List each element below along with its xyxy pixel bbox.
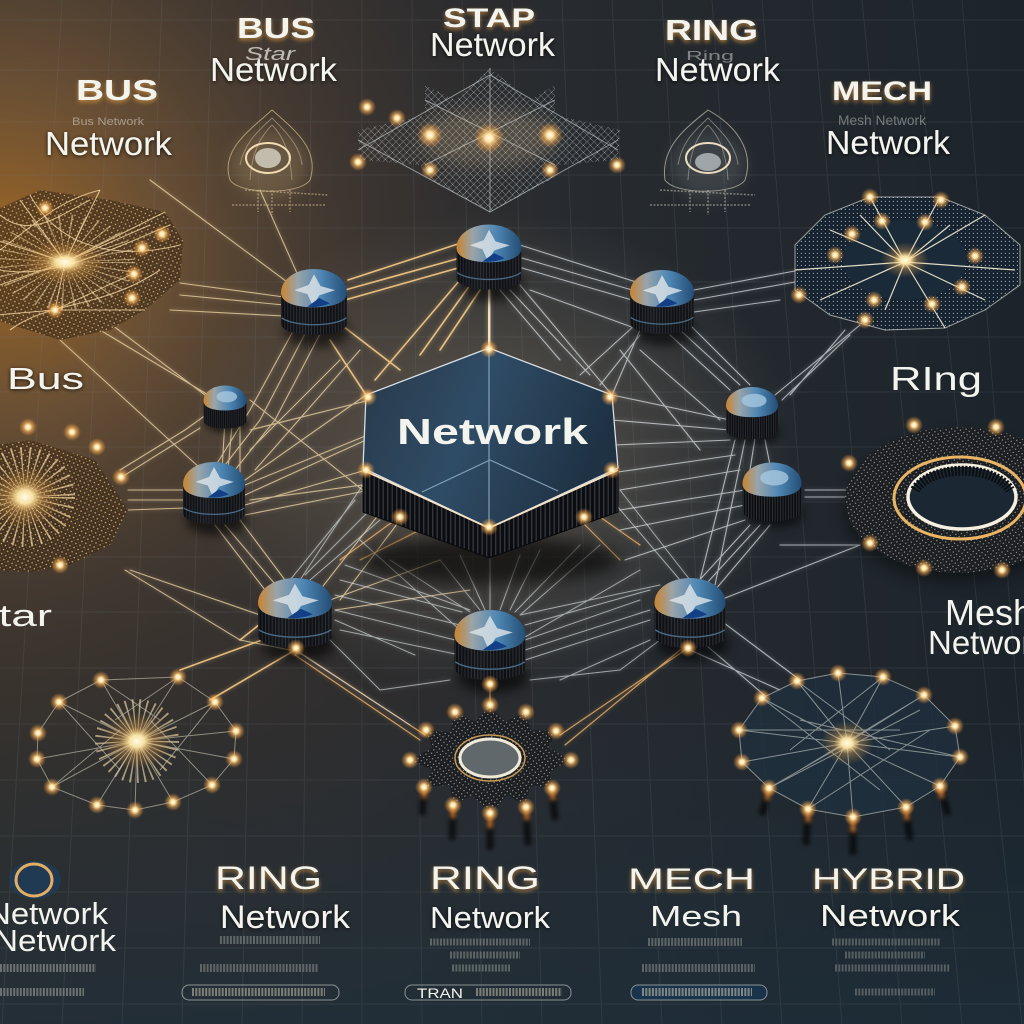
node bottom right	[654, 578, 728, 661]
bottom label: hybrid network	[812, 863, 965, 992]
cluster: star network bottom left	[28, 668, 245, 819]
bottom label: ring network 2: RING	[430, 860, 540, 896]
bottom label: hybrid network: HYBRID	[812, 863, 965, 896]
label: star network: STAP	[443, 3, 535, 33]
label: bus star network	[210, 13, 338, 88]
bottom label: ring network 1	[182, 860, 351, 1000]
cluster: ring mesh right top	[790, 188, 1020, 330]
label: bus network left: Network	[45, 125, 173, 162]
label: bus network left	[45, 75, 173, 162]
label: bus star network: Star	[245, 44, 297, 64]
side labels	[0, 360, 1024, 661]
bottom label: ring network 1: RING	[215, 860, 322, 896]
label: ring: RIng	[890, 360, 982, 397]
node bottom left	[258, 578, 335, 661]
label: mesh network	[826, 76, 951, 161]
cluster: small icon top right	[650, 110, 755, 215]
node left	[183, 462, 247, 535]
label: ring network: Network	[655, 51, 781, 88]
label: ring network	[655, 15, 781, 88]
hexagon label: Network	[397, 411, 589, 452]
node right	[742, 462, 804, 527]
bottom label: ring network 2: Network	[430, 900, 551, 935]
nodes ring	[183, 224, 804, 693]
bottom label: ring network 1: Network	[220, 899, 351, 935]
bottom label: mesh: Mesh	[650, 901, 742, 933]
cluster: ring mesh right bottom	[840, 416, 1024, 582]
label: star network: Network	[430, 26, 556, 63]
link glow	[60, 180, 860, 745]
bottom label: mesh: MECH	[628, 863, 755, 896]
label: bus network left: BUS	[76, 75, 158, 107]
bottom label: hybrid network: Network	[820, 898, 961, 933]
cluster: ring gear bottom centre	[401, 696, 580, 850]
cluster: hybrid mesh bottom right	[730, 664, 969, 855]
node top right	[630, 270, 697, 346]
node small right	[726, 387, 780, 444]
node small left	[204, 386, 248, 433]
label: bus: Bus	[7, 361, 84, 396]
top labels	[45, 3, 951, 162]
bottom label: far left network	[0, 861, 117, 992]
node bottom	[454, 610, 528, 693]
node top	[456, 224, 524, 301]
label: ring network: Ring	[686, 48, 734, 63]
label: mesh network	[928, 592, 1024, 661]
warm links: left side	[60, 180, 470, 650]
label: bus star network: Network	[210, 51, 338, 88]
bottom label: ring network 2	[405, 860, 571, 1001]
node top left	[281, 269, 350, 347]
bottom label: mesh	[628, 863, 767, 1000]
cluster: bus mesh left	[0, 190, 183, 340]
bottom labels	[0, 860, 965, 1001]
label: mesh network: MECH	[832, 76, 932, 106]
cluster: star mesh left	[0, 418, 130, 574]
label: bus network left: Bus Network	[72, 116, 145, 128]
label: ring network: RING	[665, 15, 758, 47]
cluster: small icon top left	[228, 110, 328, 215]
label: bus star network: BUS	[237, 13, 315, 45]
bottom label: ring network 2: TRAN	[417, 985, 463, 1001]
cool links: right side	[490, 245, 860, 700]
network connection lines	[60, 180, 860, 745]
central hexagon: Network	[357, 340, 621, 584]
label: mesh network: Mesh Network	[838, 112, 927, 128]
label: mesh network: Network	[826, 124, 951, 161]
cluster: top centre star mesh	[349, 68, 626, 212]
label: star network	[430, 3, 556, 63]
